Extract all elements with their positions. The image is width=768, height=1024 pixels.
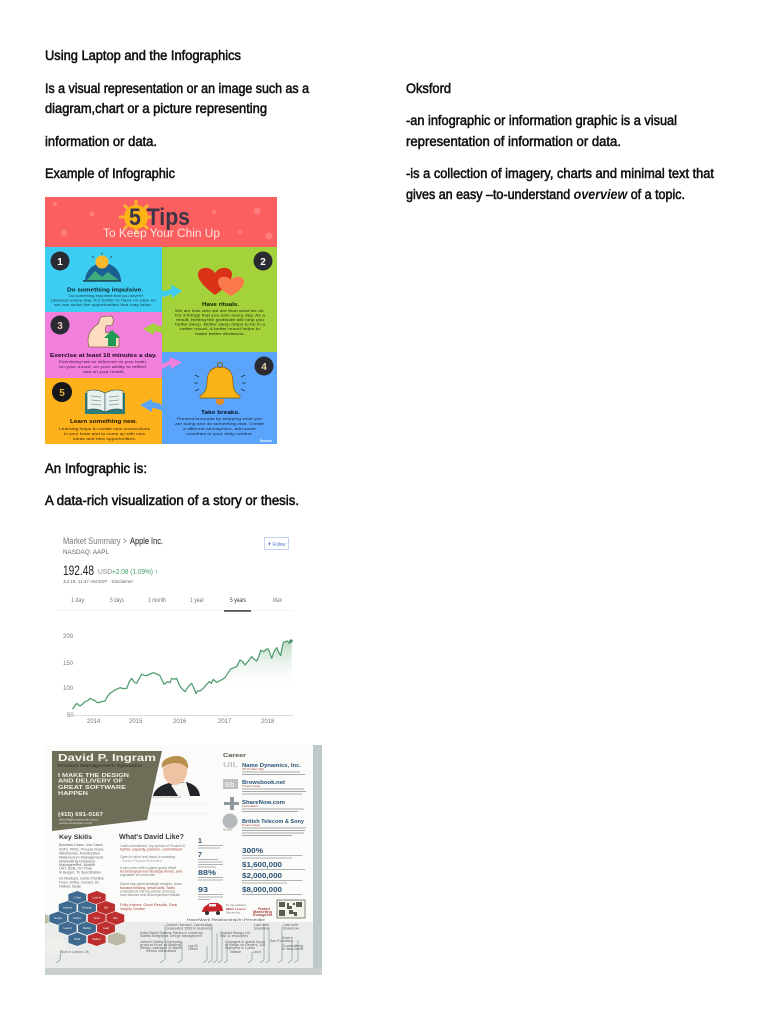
timeline text: ground floor at Beijing	[140, 943, 181, 947]
timeline text: Had 11 employees	[220, 934, 248, 938]
photo caption and pale lines: by David McWilliams	[153, 795, 182, 799]
timeline text: at Mango for Reuters, 140	[225, 943, 265, 947]
timeline text: Stateside	[230, 950, 241, 954]
award label: Product	[258, 907, 271, 911]
tip 5 body: in your brain and to come up with new	[64, 431, 145, 436]
range tabs: 1 day	[71, 598, 84, 604]
key skills: Waterscrum Management	[59, 855, 103, 859]
text block: definition line 2: diagram,chart or a picture representing	[45, 101, 267, 116]
tip 3 body: Exercising has an influence on your brain,	[59, 359, 147, 364]
range tabs: 5 years	[230, 598, 246, 604]
timeline text: San Francisco	[270, 939, 293, 943]
timeline text: Hailey Marine Systems, Masters in Leadership	[140, 931, 203, 935]
pale background hexagons	[45, 914, 126, 955]
tip 2 body: better sleep. Better sleep helps to be in a	[175, 322, 266, 326]
source mark: Source	[260, 439, 272, 443]
right stats column: $8,000,000	[242, 887, 282, 894]
hexagon skills map: Build	[74, 937, 81, 941]
tip 1 heading: Do something impulsive.	[67, 288, 144, 294]
career section	[222, 753, 306, 836]
icon: bell	[194, 362, 246, 405]
hexagon skills map: Deliver	[93, 937, 101, 941]
left stats column: 93	[198, 887, 208, 894]
career section: ShareNow.com	[242, 800, 285, 806]
what's David like: hybrid, capacity, passion, commitment	[120, 848, 182, 852]
key skills: Key Skills	[59, 834, 92, 841]
photo caption and pale lines	[150, 795, 212, 814]
key skills: Ux Mockups, Gantt, Prioritize	[59, 876, 104, 880]
chart title: Market Summary >	[63, 536, 127, 546]
left stats column: 1	[198, 838, 202, 845]
hexagon skills map: Win	[113, 916, 118, 920]
timeline text: Joined Harvard, Cambridge	[166, 923, 212, 927]
text block: definition line 3: information or data.	[45, 134, 157, 149]
icon: hearts	[198, 268, 244, 296]
decorative stars	[53, 202, 272, 240]
badge 1: 1	[57, 257, 63, 268]
range tabs	[71, 598, 282, 604]
timeline text: Office	[188, 947, 198, 951]
timeline text: Consulting	[282, 944, 303, 948]
badge 5: 5	[59, 388, 65, 399]
timeline text: Browsebook	[254, 926, 269, 930]
tip 3 body: on your mood, on your ability to reflect	[59, 364, 147, 369]
text block: Oksford definition 1 line 2: representation of information or data.	[406, 134, 621, 149]
tip 2 body: make better decisions.	[195, 331, 245, 336]
career section: Project Head	[242, 823, 260, 827]
award label: Evangelist	[253, 913, 273, 917]
price: 192.48	[63, 562, 94, 578]
contact lines	[59, 818, 99, 825]
key skills: Management, Mobile	[59, 863, 95, 867]
price change: USD	[98, 567, 113, 576]
timeline text: Graduated 1998 in Business	[166, 926, 212, 930]
career section: SONY	[223, 828, 234, 832]
icon: red car	[202, 903, 223, 915]
subtitle: To Keep Your Chin Up	[103, 228, 220, 240]
car caption: Driven by	[226, 910, 241, 914]
car caption: In my opinion	[226, 903, 246, 907]
tip 4 body: a different atmosphere, add some	[183, 426, 257, 431]
follow button	[264, 538, 288, 550]
what's David like	[119, 834, 186, 911]
x axis labels: 2016	[173, 719, 187, 725]
timeline text: Senior consultant	[146, 949, 176, 953]
key skills: Wireframes, Prioritization	[59, 851, 100, 855]
what's David like: I add commitment, my opinion of Product &	[120, 844, 186, 848]
tip 5 body	[59, 426, 150, 441]
range tabs: Max	[273, 598, 282, 604]
line chart	[72, 639, 293, 709]
hexagon skills map: Grow	[94, 916, 100, 920]
tip 1 body: planned every day. It's better to have no plan so	[51, 298, 157, 302]
tip 2 body: better mood. A better mood helps to	[180, 326, 261, 331]
active tab underline	[224, 610, 251, 612]
timeline text	[140, 923, 303, 954]
contact lines: www.example.com	[59, 821, 93, 825]
career section: UIL	[223, 760, 238, 769]
key skills: SOPs, PRDs, Process Flows,	[59, 847, 104, 851]
career section: Career	[223, 753, 247, 759]
tip 5 body: ideas and new opportunities.	[73, 436, 136, 441]
tip 3 heading: Exercise at least 10 minutes a day.	[50, 353, 158, 359]
tip 2 heading: Have rituals.	[202, 302, 240, 308]
heading: Using Laptop and the Infographics: Using Laptop and the Infographics	[45, 48, 241, 63]
tip 1 body	[51, 293, 157, 307]
hexagon skills map	[49, 891, 125, 946]
y axis labels	[63, 634, 74, 719]
timeline text: Joined Hailey University	[140, 940, 182, 944]
hexagon skills map: 5 Sets	[74, 896, 82, 900]
tip 4 body	[175, 416, 265, 436]
chart company name: Apple Inc.	[130, 536, 163, 546]
statement: GREAT SOFTWARE	[58, 785, 126, 791]
what's David like: Fully trained: Good Results, Real	[120, 903, 177, 907]
key skills: Business Cases, Use Cases	[59, 843, 103, 847]
statement: HAPPEN	[58, 791, 88, 797]
hexagon skills map: Market	[83, 926, 91, 930]
timeline text: Last 6	[253, 950, 261, 954]
panel: tip 1 blue	[45, 247, 162, 312]
what's David like: Open to drive and focus in amazing	[120, 855, 175, 859]
what's David like: capable of execute	[120, 873, 155, 877]
price change	[98, 567, 158, 576]
phone: (415) 691-0167	[58, 812, 103, 818]
key skills: UAT, B2B, On Time	[59, 866, 92, 870]
panel: tip 2 green	[162, 247, 277, 352]
panel: tip 3 pink	[45, 312, 162, 378]
tip 3 body	[59, 359, 147, 374]
what's David like: A rare peer with a game gravy effort	[120, 866, 176, 870]
bottom grey band	[45, 922, 313, 969]
what's David like: - Senior Product Executive	[120, 859, 162, 863]
heading: Oksford: Oksford	[406, 81, 451, 96]
award label: Marketing	[253, 910, 272, 914]
panel: David P. Ingram resume infographic	[45, 745, 322, 975]
career section: Browsbook.net	[242, 780, 285, 786]
timeline	[56, 923, 298, 963]
x axis labels	[87, 719, 275, 725]
key skills: Deliver, Scale	[59, 885, 81, 889]
header band	[45, 197, 277, 247]
x axis labels: 2015	[129, 719, 143, 725]
icon: mountain sun	[83, 252, 121, 282]
y axis labels: 200	[63, 634, 74, 640]
range tabs: 1 month	[148, 598, 166, 604]
price change: +2.08 (1.09%) ↑	[112, 567, 158, 576]
what's David like: Integrity, Creative	[120, 907, 145, 911]
tip 2 body: result, feeling the gratitude will help you	[176, 317, 264, 322]
badge 2: 2	[260, 257, 266, 268]
tip 4 heading: Take breaks.	[201, 410, 240, 416]
right stats column: $1,600,000	[242, 862, 282, 869]
left stats column	[198, 838, 223, 900]
tip 1 body: Do something impulsive that you haven't	[69, 293, 144, 298]
y axis labels: 150	[63, 661, 74, 667]
career section: Bb	[225, 782, 234, 789]
title: 5 Tips: 5 Tips	[129, 204, 190, 231]
heading: Example of Infographic: Example of Infographic	[45, 166, 175, 181]
what's David like: David has great strategic insights, team	[120, 882, 182, 886]
follow button: ✦ Follow	[268, 541, 286, 548]
timeline text: Changed to global focus	[225, 940, 265, 944]
career section: VP Product Mgt	[242, 767, 264, 771]
what's David like: What's David Like?	[119, 834, 184, 841]
timeline text: In Bay Area	[282, 947, 303, 951]
what's David like: how discuss real accomplished results	[120, 893, 180, 897]
text block: Oksford definition 2 line 2: gives an easy –to-understand overview of a topic.	[406, 187, 685, 202]
arrow: blue to green	[162, 284, 182, 298]
left stats column: 88%	[198, 870, 217, 877]
name: David P. Ingram	[58, 752, 156, 764]
x axis labels: 2018	[261, 719, 275, 725]
text block: definition line 1: Is a visual representation or an image such as a	[45, 81, 309, 96]
arrow: pink to blue	[162, 357, 182, 369]
icon: open book	[85, 390, 125, 414]
badge 4: 4	[261, 362, 267, 373]
what's David like: focused thinking, detail skills, Sales	[120, 886, 175, 890]
tip 2 body: Do 3 things that you love every day. As a	[175, 312, 266, 318]
text block: data-rich visualization: A data-rich visualization of a story or thesis.	[45, 493, 299, 508]
right grey strip	[313, 745, 322, 975]
text block: Oksford definition 2 line 1: -is a collection of imagery, charts and minimal text that	[406, 166, 714, 181]
right stats column: 300%	[242, 848, 264, 855]
right stats column: $2,000,000	[242, 873, 282, 880]
olive header block	[52, 751, 162, 831]
career section: Product Head	[242, 784, 260, 788]
hexagon skills map: Develop	[82, 906, 92, 910]
right stats column	[242, 848, 305, 895]
y axis labels: 100	[63, 686, 74, 692]
timeline text: Last sold	[254, 923, 269, 927]
hexagon skills map: Launch	[63, 926, 73, 930]
timeline text: Sharenow	[283, 926, 300, 930]
text block: Oksford definition 1 line 1: -an infographic or information graphic is a visual	[406, 113, 677, 128]
photo: portrait	[153, 756, 200, 796]
x axis labels: 2017	[218, 719, 232, 725]
hexagon skills map: Improve	[63, 906, 73, 910]
car caption	[226, 903, 246, 914]
career section: Name Dynamics, Inc.	[242, 763, 301, 769]
hexagon skills map: Lead	[103, 926, 109, 930]
key skills: In Budget, To Specification	[59, 870, 101, 874]
x axis labels: 2014	[87, 719, 101, 725]
car caption: MkII Lexus	[226, 907, 246, 911]
left stats column: 7	[198, 852, 202, 859]
tip 5 heading: Learn something new.	[70, 419, 138, 425]
timeline text: Last sold	[283, 923, 298, 927]
arrow: green to pink	[143, 323, 162, 335]
tip 2 body	[175, 308, 266, 336]
hexagon skills map: Sell	[104, 906, 109, 910]
y axis labels: 50	[67, 713, 74, 719]
statement: I MAKE THE DESIGN	[58, 773, 129, 779]
panel: 5 Tips infographic	[45, 197, 277, 444]
what's David like: technological and strategic levels, and	[120, 870, 182, 874]
arrow: blue to orange	[140, 399, 162, 412]
tip 5 body: Learning helps to create new connections	[59, 426, 150, 431]
timeline text: Moved to	[282, 936, 293, 940]
panel: tip 4 blue	[162, 352, 277, 444]
contact lines: david@example.com	[59, 818, 99, 822]
timeline text: Started Bridgeport, Design Management	[140, 934, 202, 938]
icon: QR code	[277, 900, 305, 918]
tip 2 body: We are less who we are than what we do.	[175, 308, 265, 313]
panel: tip 5 orange	[45, 378, 162, 444]
hexagon skills map: Design	[54, 916, 63, 920]
timeline text: Design, managed 24 teams	[140, 946, 182, 950]
hexagon skills map: Define	[74, 916, 82, 920]
ticker: NASDAQ: AAPL	[63, 549, 109, 556]
tip 1 body: we can seize the opportunities that may arise.	[54, 302, 152, 307]
award label	[253, 907, 273, 917]
statement: AND DELIVERY OF	[58, 778, 124, 784]
badge 3: 3	[57, 321, 63, 332]
timeline text: Started Mango Ltd	[220, 931, 250, 935]
timestamp: Jul 19, 11:47 AM EDT · Disclaimer	[63, 579, 133, 585]
icon: flexed arm	[88, 316, 120, 347]
hexagon skills map: Look at	[92, 896, 101, 900]
what's David like: understands the big picture and long	[120, 890, 175, 894]
key skills: Marketing Delivery	[59, 860, 95, 864]
career section: Consultant	[242, 804, 258, 808]
location label: Born in London, UK	[61, 950, 90, 954]
panel: Apple stock chart	[57, 536, 293, 725]
range tabs: 5 days	[110, 598, 124, 604]
range tabs: 1 year	[190, 598, 204, 604]
tip 4 body: novelties in your daily routine.	[186, 431, 253, 436]
key skills	[59, 834, 104, 889]
icon: sun behind 5	[119, 200, 153, 234]
key skills: Focus, Define, Connect, Do	[59, 880, 99, 884]
timeline heading: Have/Work Relationship/In Percentile	[187, 918, 265, 922]
timeline text: employees in 3 years	[225, 946, 255, 950]
heading: An Infographic is: An Infographic is:	[45, 461, 147, 476]
tip 3 body: and on your health.	[83, 369, 125, 374]
timeline text: Last UK	[188, 944, 199, 948]
job title: Product Management Specialist	[58, 763, 143, 768]
tip 4 body: are doing and do something else. Create	[175, 421, 265, 426]
statement	[58, 773, 129, 797]
tip 4 body: Prevent burnouts by stopping what you	[177, 416, 262, 421]
career section: British Telecom & Sony	[242, 819, 304, 825]
